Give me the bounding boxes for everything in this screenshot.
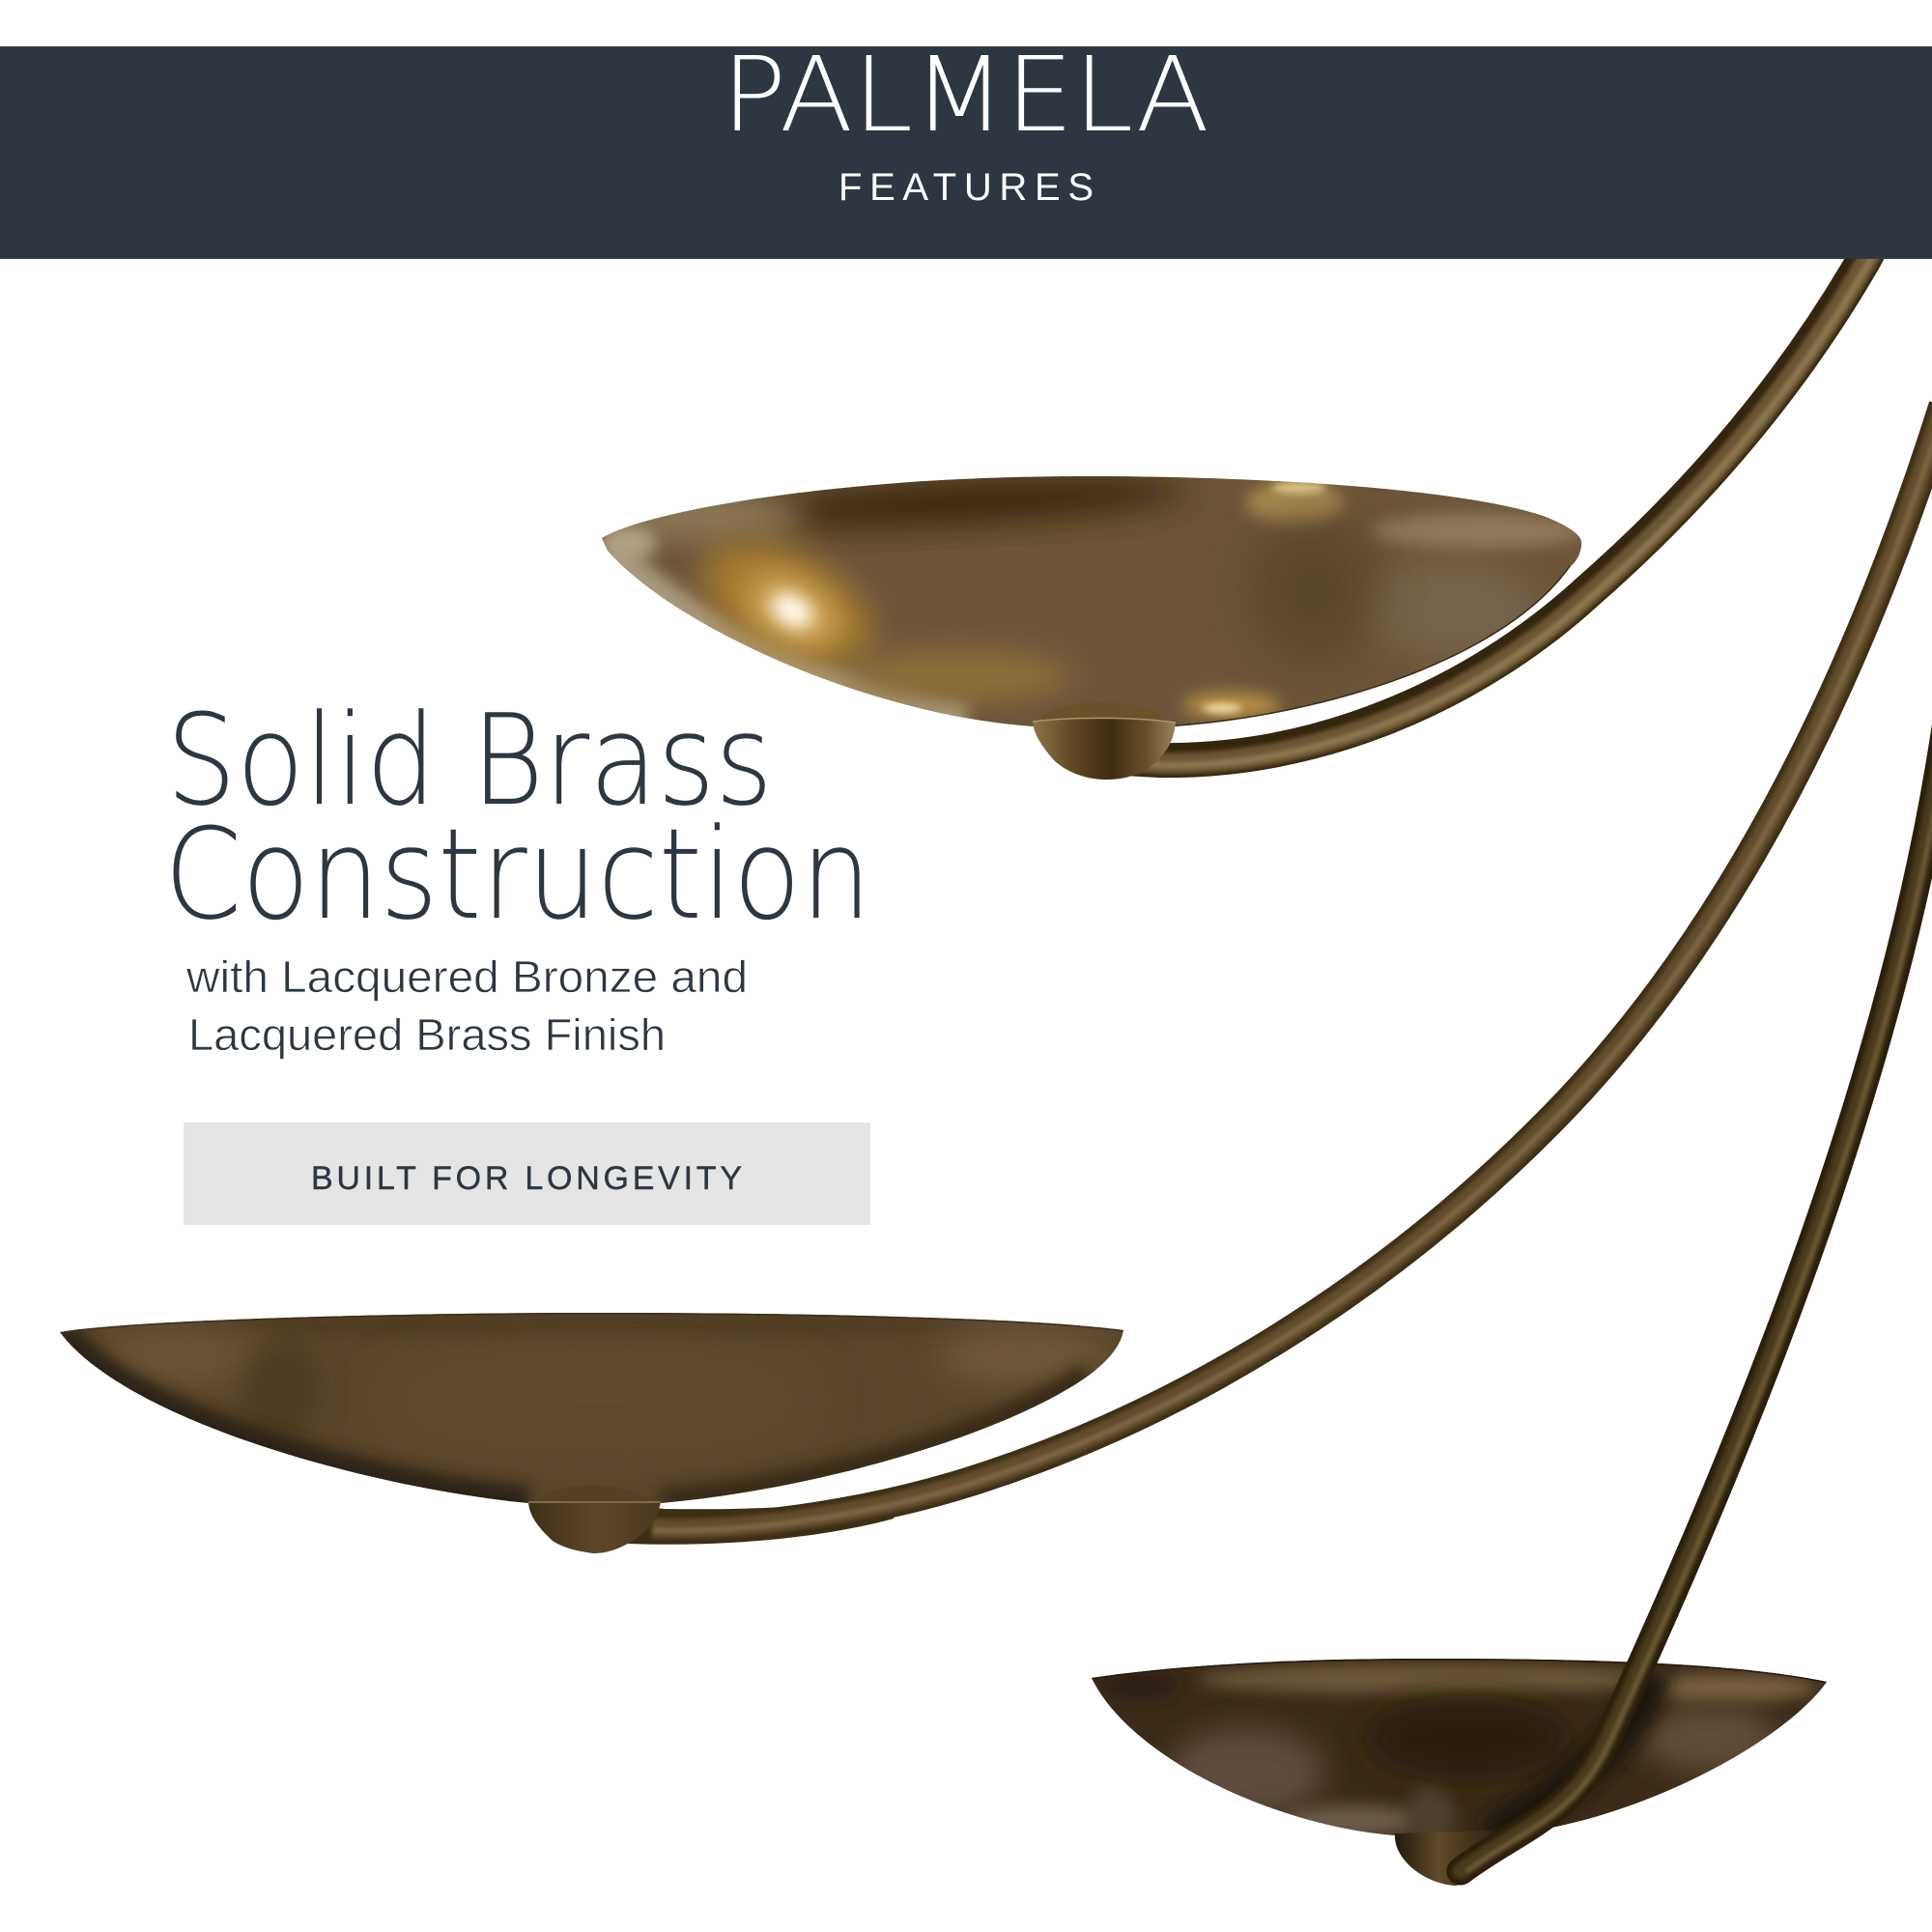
middle shade nub	[528, 1486, 661, 1553]
description text	[185, 952, 748, 1060]
upper shade	[589, 468, 1594, 780]
lower shade body	[1092, 1659, 1827, 1835]
middle shade	[48, 1304, 1140, 1553]
description text: with Lacquered Bronze and	[185, 952, 748, 1002]
lamp arm: upper shade	[1125, 232, 1883, 765]
callout button: built for longevity: BUILT FOR LONGEVITY	[311, 1160, 742, 1197]
lower shade nub	[1395, 1831, 1492, 1886]
title: PALMELA: PALMELA	[722, 36, 1209, 156]
heading: Solid Brass Construction: Construction	[164, 801, 871, 948]
lamp arm: middle shade	[628, 406, 1932, 1545]
callout button: built for longevity	[184, 1122, 870, 1225]
lamp arm: lower shade	[1461, 715, 1932, 1871]
heading: Solid Brass Construction: Solid Brass	[166, 687, 773, 834]
heading: Solid Brass Construction	[164, 687, 871, 948]
subtitle: FEATURES: FEATURES	[838, 166, 1094, 209]
description text: Lacquered Brass Finish	[188, 1009, 666, 1060]
upper shade nub	[1033, 702, 1176, 780]
header band	[0, 36, 1932, 259]
